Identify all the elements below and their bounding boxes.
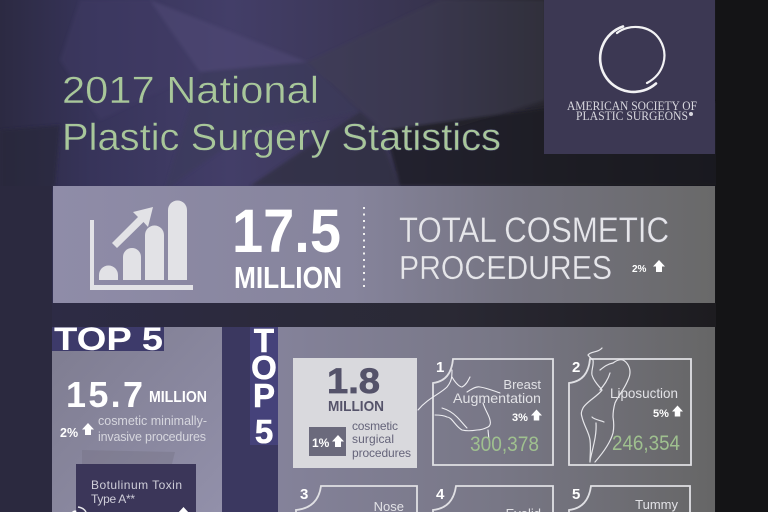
- card 2: liposuction: 246,354: [612, 432, 680, 455]
- card 5: tummy tuck: 5: [572, 486, 580, 503]
- card 4: eyelid surgery: [433, 486, 553, 512]
- logo panel: [544, 0, 715, 154]
- logo text: PLASTIC SURGEONS: [576, 109, 688, 123]
- total label: TOTAL COSMETIC: [399, 211, 669, 250]
- card: surgical total: 1%: [312, 436, 330, 450]
- card: botulinum toxin: [70, 464, 196, 512]
- icon: body line art: [581, 348, 630, 462]
- card 2: liposuction: 2: [572, 359, 580, 376]
- card 1: breast augmentation: Breast: [503, 377, 541, 392]
- card: surgical total: procedures: [352, 446, 411, 460]
- logo text: [567, 99, 697, 123]
- heading: vertical top 5: O: [251, 349, 277, 386]
- card 1: breast augmentation: Augmentation: [453, 390, 541, 406]
- card 5: tummy tuck: [569, 486, 690, 512]
- minimally-invasive change: 2%: [60, 426, 78, 440]
- card 2: liposuction: [569, 348, 691, 465]
- heading: vertical top 5: P: [253, 377, 275, 414]
- panel: total cosmetic procedures: [53, 186, 715, 303]
- card 1: breast augmentation: 1: [436, 359, 444, 376]
- minimally-invasive figure: 15.7: [66, 374, 143, 415]
- logo text: AMERICAN SOCIETY OF: [567, 99, 697, 113]
- total label: PROCEDURES: [399, 249, 612, 286]
- card: botulinum toxin: Type A**: [91, 492, 135, 506]
- card: surgical total: [293, 358, 417, 468]
- card 4: eyelid surgery: 4: [436, 486, 445, 503]
- logo ring: [600, 26, 664, 92]
- heading: vertical top 5: 5: [255, 413, 273, 450]
- card: surgical total: MILLION: [328, 398, 384, 415]
- card 2: liposuction: 5%: [653, 408, 669, 420]
- minimally-invasive label: cosmetic minimally-: [98, 414, 207, 428]
- title: 2017 National: [62, 70, 319, 112]
- total change: 2%: [632, 264, 647, 275]
- card: surgical total: 1.8: [327, 362, 380, 401]
- total change: [632, 260, 665, 275]
- heading: vertical top 5: T: [254, 322, 274, 359]
- total label: [399, 211, 669, 286]
- card 1: breast augmentation: 300,378: [470, 433, 539, 456]
- panel: top 5 minimally-invasive: [52, 321, 222, 512]
- card 2: liposuction: Liposuction: [610, 385, 678, 401]
- total figure: 17.5: [232, 197, 341, 265]
- minimally-invasive label: invasive procedures: [98, 430, 206, 444]
- heading: vertical top 5: [250, 322, 278, 450]
- total figure: [232, 197, 342, 295]
- heading: top 5: TOP 5: [54, 321, 163, 357]
- card: surgical total: surgical: [352, 432, 394, 446]
- card 5: tummy tuck: Tummy: [635, 497, 678, 512]
- panel: top 5 surgical: [278, 327, 715, 512]
- card 1: breast augmentation: 3%: [512, 412, 528, 424]
- icon: breast line art: [418, 370, 500, 440]
- title: Plastic Surgery Statistics: [62, 117, 501, 159]
- title: [62, 70, 501, 159]
- total figure: MILLION: [234, 260, 342, 295]
- card: surgical total: cosmetic: [352, 419, 398, 433]
- card 3: nose reshaping: [296, 486, 417, 512]
- card 1: breast augmentation: [418, 359, 553, 465]
- card: botulinum toxin: Botulinum Toxin: [91, 478, 182, 492]
- minimally-invasive change: [60, 423, 94, 440]
- minimally-invasive figure: [66, 374, 207, 415]
- minimally-invasive label: [98, 414, 207, 444]
- card 3: nose reshaping: 3: [300, 486, 308, 503]
- minimally-invasive figure: MILLION: [149, 389, 207, 406]
- icon: rising bar chart: [90, 200, 193, 290]
